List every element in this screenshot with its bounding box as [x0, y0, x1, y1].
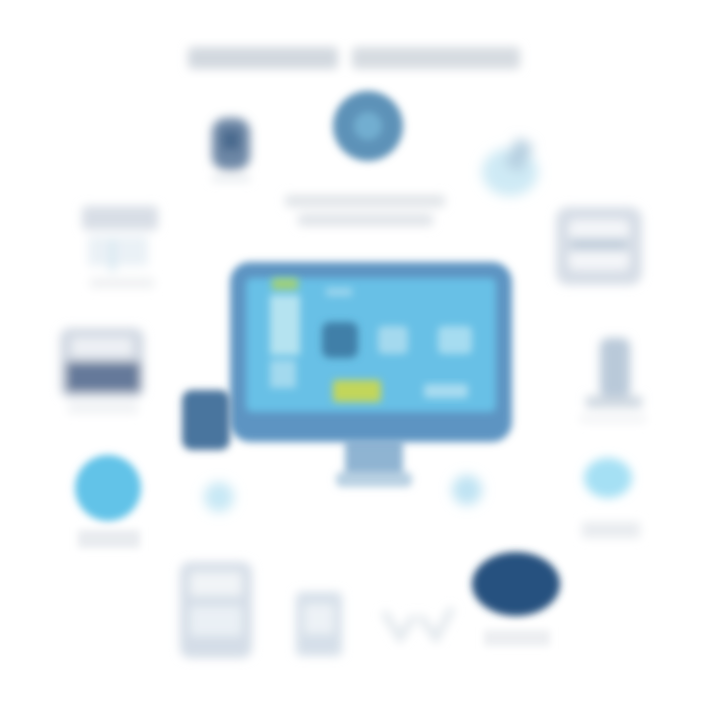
- icon: top left device: [212, 118, 250, 181]
- icon: left cyan circle: [75, 455, 141, 548]
- icon: phone beside monitor: [182, 390, 230, 450]
- panel: bottom left card: [180, 562, 252, 658]
- icon: small left glow: [204, 482, 234, 512]
- monitor screen: [246, 278, 496, 412]
- screen light bar: [424, 384, 468, 398]
- icon: right cyan glow with label: [582, 458, 640, 538]
- icon: small right glow: [452, 475, 482, 505]
- icon: top center circle: [333, 91, 403, 161]
- screen dark block: [322, 322, 358, 358]
- monitor: [230, 262, 512, 487]
- screen light tiles: [326, 288, 472, 354]
- monitor stand: [336, 440, 412, 487]
- title: [188, 47, 520, 69]
- screen sidebar: [270, 278, 300, 388]
- panel: top left text and icon: [82, 206, 158, 288]
- icon: bottom check shapes: [384, 608, 452, 638]
- center subtitle: [285, 195, 445, 226]
- panel: top right window icon: [556, 207, 642, 285]
- icon: bottom right dark ellipse: [472, 552, 560, 646]
- panel: bottom center card: [296, 592, 342, 656]
- screen yellow bar: [333, 380, 381, 402]
- panel: left printer icon: [60, 328, 144, 413]
- panel: right tower icon: [580, 338, 646, 422]
- monitor frame: [230, 262, 512, 442]
- icon: top right wand: [482, 138, 538, 196]
